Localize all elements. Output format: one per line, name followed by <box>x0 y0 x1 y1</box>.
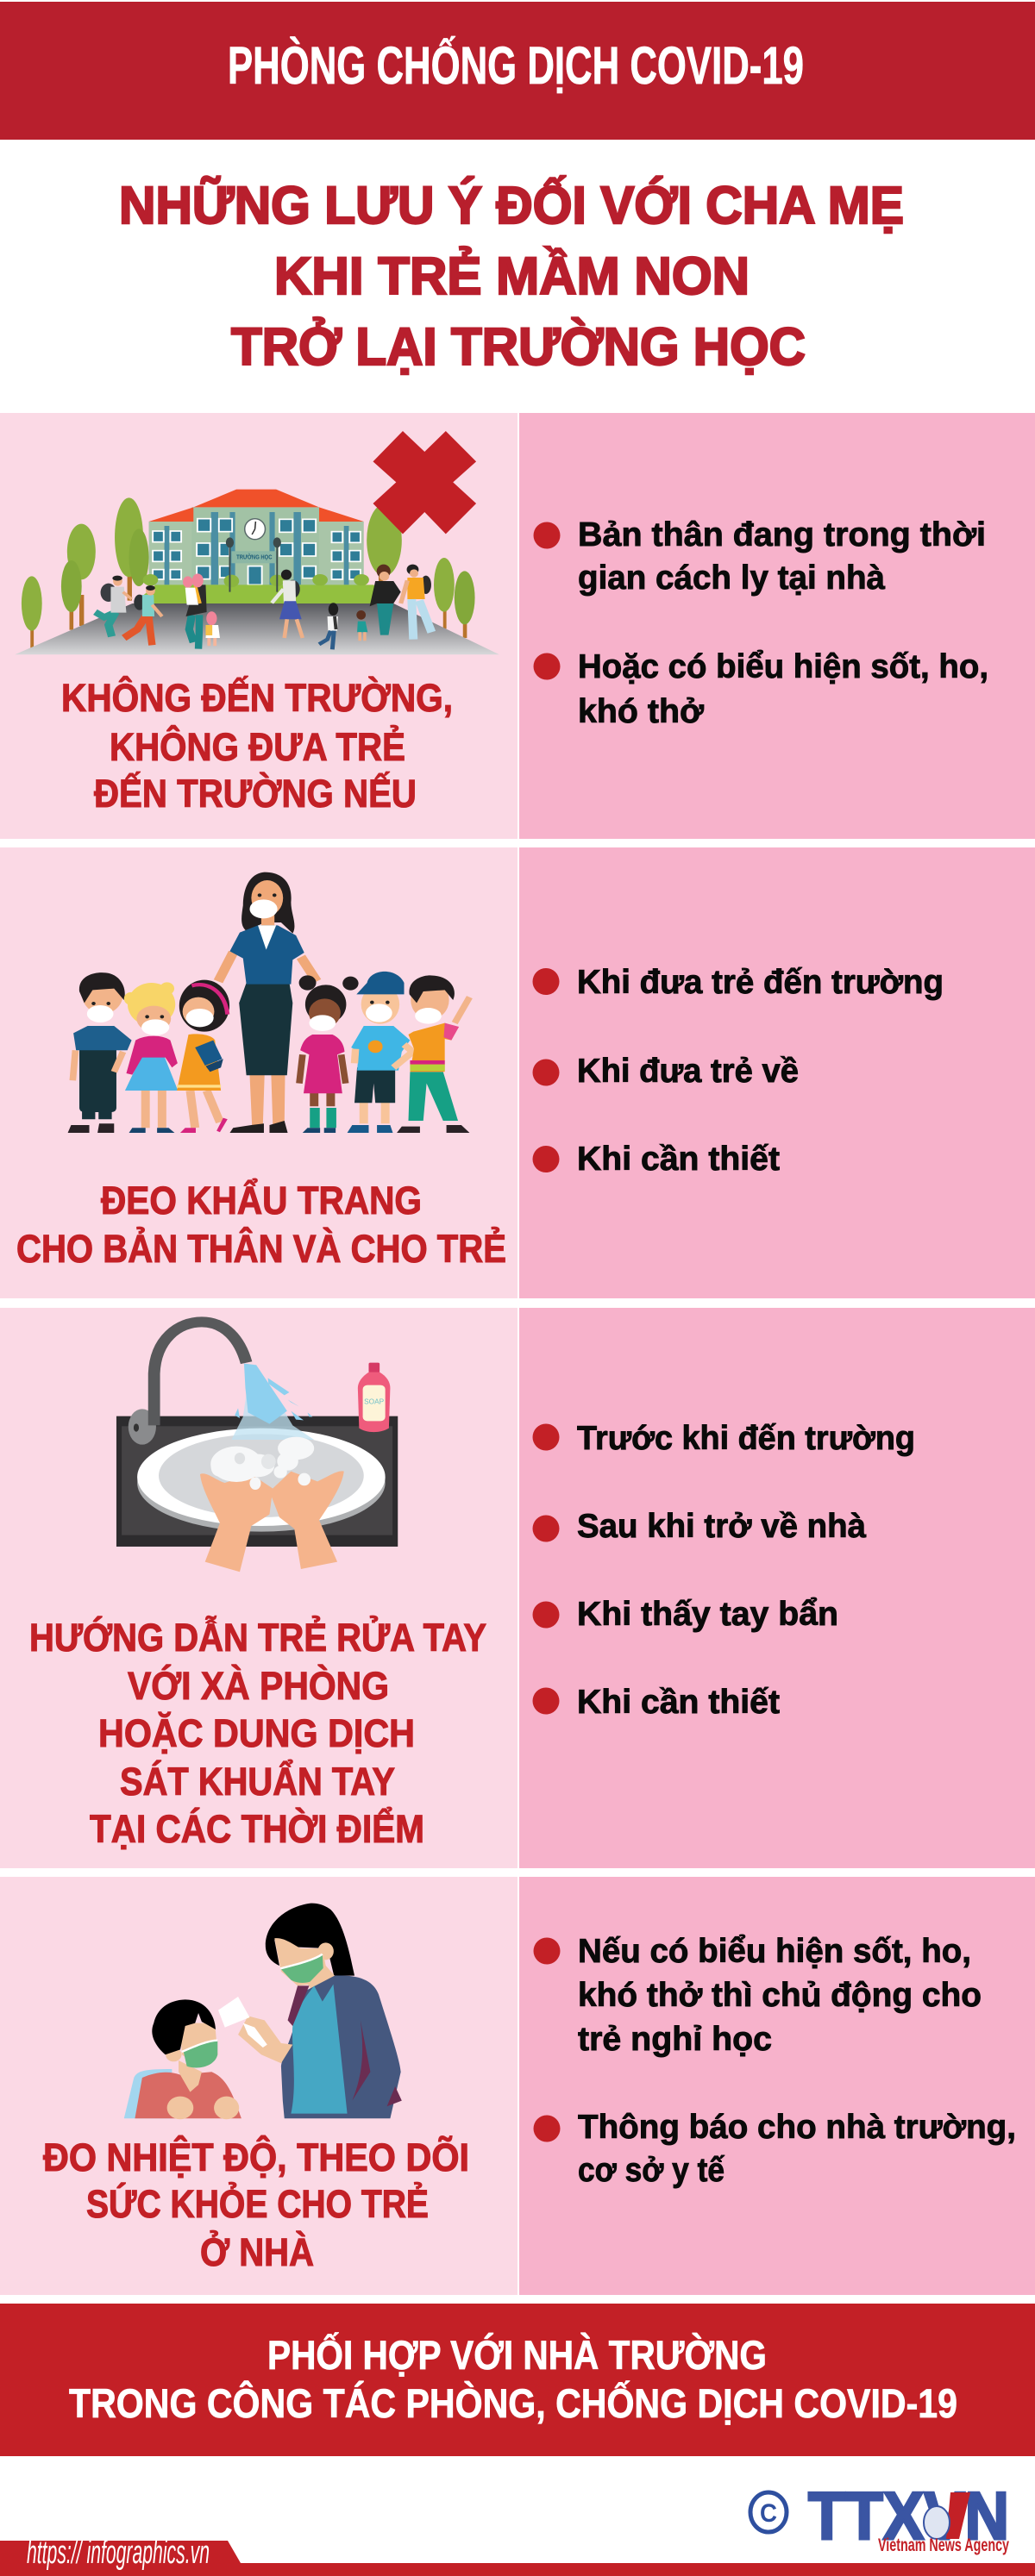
illustration: teacher and children <box>68 872 469 1133</box>
illustration: mother checking child's temperature <box>124 1904 402 2119</box>
main title: NHỮNG LƯU Ý ĐỐI VỚI CHA MẸ <box>119 176 904 234</box>
panel 2 list: Khi đưa trẻ về <box>577 1053 799 1090</box>
figure: mother <box>238 1904 402 2118</box>
panel 4 list: cơ sở y tế <box>578 2152 724 2189</box>
panel 2 heading: ĐEO KHẨU TRANG <box>101 1179 422 1222</box>
panel 1 heading <box>61 676 453 816</box>
panel 4 heading: ĐO NHIỆT ĐỘ, THEO DÕI <box>43 2135 469 2179</box>
main title: KHI TRẺ MẦM NON <box>274 247 750 305</box>
panel 3 list: Khi thấy tay bẩn <box>577 1596 838 1633</box>
person: mother carrying child <box>183 573 220 649</box>
foam and bubbles <box>210 1437 314 1490</box>
soap bottle: SOAP <box>364 1397 384 1405</box>
panel 2 list: Khi đưa trẻ đến trường <box>577 964 944 1001</box>
icon: red X <box>373 431 476 534</box>
footer banner <box>0 2304 1035 2456</box>
person: father and daughter <box>356 565 401 641</box>
illustration: school and people <box>15 431 499 654</box>
faucet <box>129 1322 247 1445</box>
panel 1 heading: KHÔNG ĐƯA TRẺ <box>110 725 405 769</box>
panel 1 list: gian cách ly tại nhà <box>578 560 885 597</box>
icon: thermometer <box>218 1997 267 2048</box>
bottom strip with url flag <box>0 2535 1035 2576</box>
person: woman in blue skirt <box>272 570 303 638</box>
panel 1 list: Bản thân đang trong thời <box>578 516 986 553</box>
main title: TRỞ LẠI TRƯỜNG HỌC <box>231 317 806 376</box>
sink basin <box>137 1429 386 1532</box>
panel 4 list: khó thở thì chủ động cho <box>578 1977 982 2014</box>
panel 4 heading: Ở NHÀ <box>200 2230 314 2274</box>
figure: teacher <box>218 872 317 1133</box>
footer banner: PHỐI HỢP VỚI NHÀ TRƯỜNG <box>267 2332 767 2378</box>
panel 2 heading <box>16 1179 506 1271</box>
hands <box>200 1471 344 1572</box>
logo: copyright mark and TTXVN: TTXVN <box>808 2478 1009 2554</box>
figure: boy in blue cap <box>348 972 412 1133</box>
panel 4 heading: SỨC KHỎE CHO TRẺ <box>86 2182 429 2226</box>
panel 3 heading: VỚI XÀ PHÒNG <box>128 1664 389 1708</box>
panel 3 heading: HOẶC DUNG DỊCH <box>98 1711 415 1755</box>
soap bottle <box>358 1363 390 1432</box>
figure: child <box>124 1999 242 2119</box>
illustration: washing hands at a sink <box>116 1322 398 1572</box>
panel 1 list: Hoặc có biểu hiện sốt, ho, <box>578 648 988 685</box>
panel 3 heading: TẠI CÁC THỜI ĐIỂM <box>90 1807 424 1851</box>
figure: girl with books <box>177 980 229 1133</box>
panel 2: wear masks <box>0 847 1035 1298</box>
panel 4 list <box>533 1933 1016 2189</box>
panel 1 heading: ĐẾN TRƯỜNG NẾU <box>94 772 417 816</box>
panel 4 list: Nếu có biểu hiện sốt, ho, <box>578 1933 971 1970</box>
panel 1 heading: KHÔNG ĐẾN TRƯỜNG, <box>61 676 453 720</box>
bottom strip with url flag: https:// infographics.vn <box>27 2535 210 2571</box>
panel 3: hand washing <box>0 1308 1035 1868</box>
panel 2 heading: CHO BẢN THÂN VÀ CHO TRẺ <box>16 1227 506 1271</box>
person: small child <box>319 603 338 649</box>
panel 3 list <box>533 1420 915 1721</box>
figure: girl in pink dress <box>299 975 359 1133</box>
panel 4: temperature check <box>0 1877 1035 2295</box>
figure: waving boy <box>397 975 469 1133</box>
panel 2 list <box>533 964 944 1178</box>
panel 3 heading: SÁT KHUẨN TAY <box>120 1760 395 1804</box>
logo: copyright mark and TTXVN: C <box>760 2499 777 2528</box>
panel 4 list: Thông báo cho nhà trường, <box>578 2109 1016 2146</box>
panel 3 list: Sau khi trở về nhà <box>577 1508 866 1545</box>
panel 1 list: khó thở <box>578 693 704 730</box>
panel 3 heading: HƯỚNG DẪN TRẺ RỬA TAY <box>29 1616 486 1660</box>
figure: boy in overalls <box>68 972 132 1133</box>
figure: blonde girl <box>124 982 178 1133</box>
header band <box>0 2 1035 140</box>
panel 3 list: Khi cần thiết <box>577 1684 780 1721</box>
illustration: school and people: TRƯỜNG HỌC <box>236 553 273 561</box>
panel 1 list <box>533 516 988 730</box>
person: man with yellow shirt <box>401 565 431 640</box>
person: student with backpack <box>124 585 162 645</box>
panel 4 heading <box>43 2135 469 2274</box>
main title <box>119 176 904 376</box>
water stream <box>231 1364 314 1440</box>
panel 4 list: trẻ nghỉ học <box>578 2021 772 2058</box>
panel 1: do not go to school <box>0 413 1035 839</box>
header title: PHÒNG CHỐNG DỊCH COVID-19 <box>228 36 804 95</box>
person: running student <box>95 576 132 636</box>
panel 3 heading <box>29 1616 486 1851</box>
panel 2 list: Khi cần thiết <box>577 1141 780 1178</box>
panel 3 list: Trước khi đến trường <box>577 1420 915 1457</box>
